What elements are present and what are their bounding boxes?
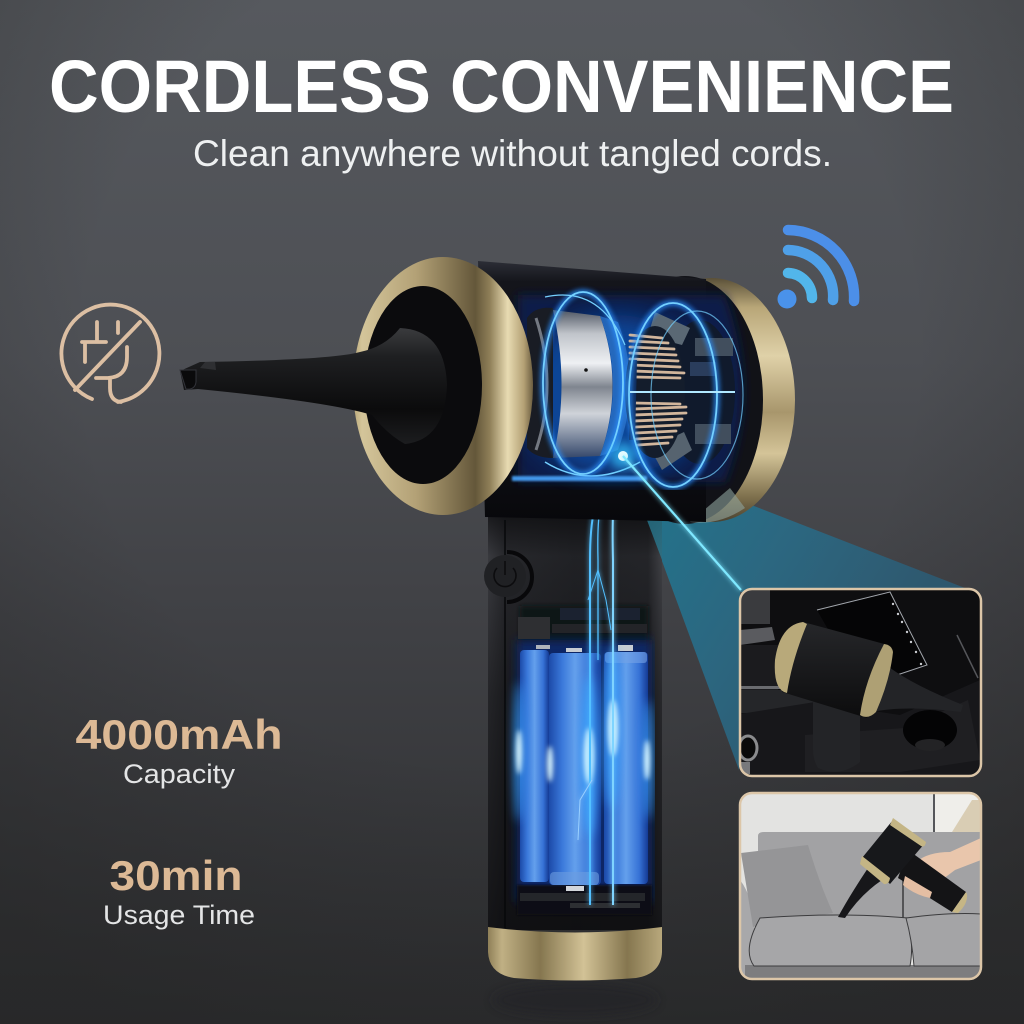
beam line bbox=[623, 456, 741, 590]
barrel body bbox=[478, 261, 706, 522]
handle seam bbox=[504, 520, 506, 928]
panel: sofa use scene bbox=[740, 793, 981, 979]
battery cell 2 bbox=[549, 653, 601, 885]
side cup bbox=[739, 736, 757, 760]
mini device front band bbox=[860, 644, 893, 717]
mini device nozzle bbox=[876, 668, 960, 711]
cup holder bbox=[903, 710, 957, 750]
stat: capacity bbox=[76, 711, 282, 789]
gold base bbox=[488, 927, 662, 980]
stat: capacity: 4000mAh bbox=[76, 711, 282, 758]
lower chamber edge light bbox=[512, 476, 647, 481]
electric lines down handle bbox=[578, 470, 622, 905]
panel border bbox=[740, 589, 981, 776]
fingers bbox=[903, 876, 932, 898]
motor chamber bbox=[512, 292, 743, 487]
rear fan bbox=[648, 312, 735, 470]
panel border bbox=[740, 793, 981, 979]
copper pins bbox=[625, 326, 686, 458]
mini handle bbox=[898, 850, 966, 912]
mini nozzle bbox=[838, 868, 882, 918]
subtitle: Clean anywhere without tangled cords. bbox=[193, 133, 832, 174]
battery window bbox=[514, 606, 653, 915]
stat: usage time bbox=[103, 852, 255, 930]
power button bbox=[484, 552, 532, 602]
handle bbox=[488, 505, 662, 930]
title: CORDLESS CONVENIENCE bbox=[49, 45, 954, 128]
throw pillow bbox=[741, 845, 833, 927]
front gold ring bbox=[353, 257, 533, 515]
battery glow spots bbox=[516, 700, 650, 784]
console bbox=[740, 680, 980, 776]
battery glow halo bbox=[514, 648, 653, 836]
panel: car use scene bbox=[739, 589, 981, 776]
stat: usage time: 30min bbox=[110, 852, 242, 899]
mini device body bbox=[782, 622, 888, 718]
icon: wifi signal bbox=[778, 230, 854, 308]
sofa base bbox=[745, 965, 981, 979]
mini device rear band bbox=[775, 622, 807, 693]
battery cell 1 bbox=[520, 650, 549, 882]
glowing source dot bbox=[610, 443, 636, 469]
rear gold ring bbox=[607, 276, 795, 524]
floor reflection bbox=[493, 984, 657, 1016]
stat: capacity: Capacity bbox=[123, 759, 236, 789]
sofa back bbox=[758, 832, 981, 925]
mini gold end bbox=[952, 892, 967, 913]
stat: usage time: Usage Time bbox=[103, 900, 255, 930]
silver motor bbox=[527, 308, 630, 458]
screen bbox=[817, 592, 927, 675]
vacuum device bbox=[180, 257, 795, 980]
seat cushion right bbox=[906, 914, 981, 966]
blue energy rings glow bbox=[543, 292, 717, 487]
mini device handle bbox=[813, 702, 860, 734]
seat cushion left bbox=[749, 915, 912, 966]
mini body bbox=[862, 820, 925, 884]
battery cell 3 bbox=[604, 652, 648, 884]
nozzle bbox=[180, 328, 447, 444]
teal beam bbox=[624, 458, 965, 770]
sofa arm and lower fill bbox=[741, 882, 754, 975]
palm bbox=[920, 838, 980, 877]
icon: no plug bbox=[61, 305, 159, 402]
beam over handle bbox=[633, 483, 662, 560]
blue energy rings bbox=[543, 292, 743, 487]
mini bands bbox=[890, 818, 926, 846]
